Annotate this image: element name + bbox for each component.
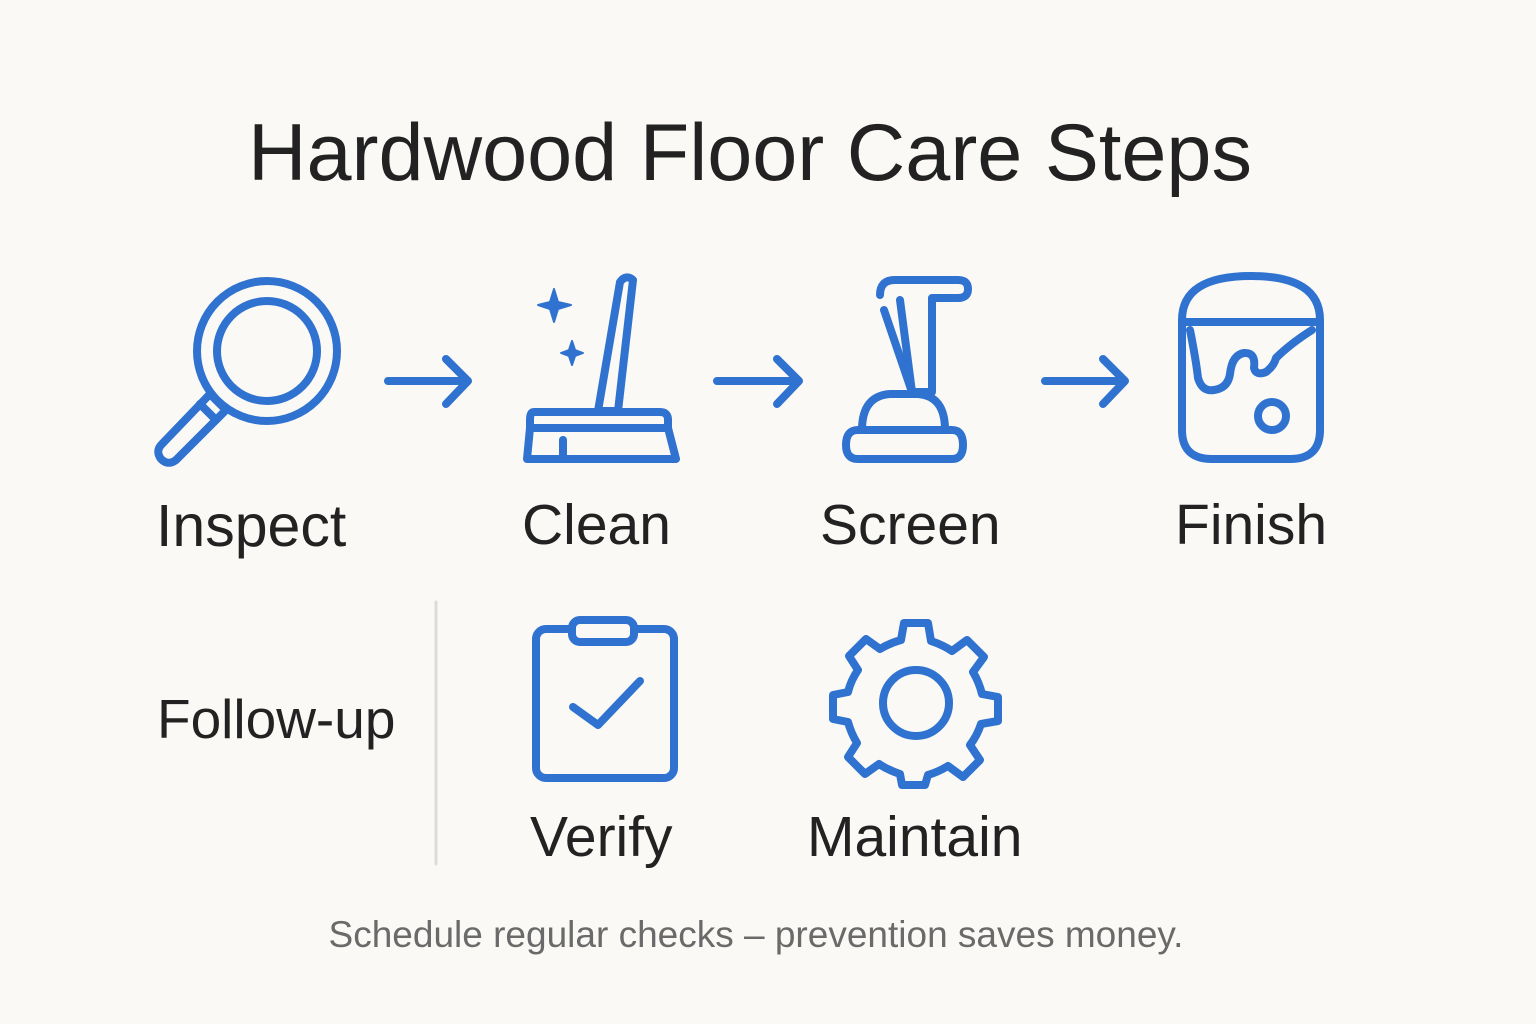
label: Screen: Screen xyxy=(820,493,1001,557)
icon: gear xyxy=(833,623,998,785)
arrow 3 xyxy=(1045,359,1125,404)
arrow 1 xyxy=(388,359,468,404)
icon: floor screener xyxy=(846,280,968,459)
arrow 2 xyxy=(717,359,799,404)
title: Hardwood Floor Care Steps xyxy=(248,108,1252,198)
label: Verify: Verify xyxy=(530,805,673,869)
icon: broom xyxy=(527,277,676,459)
label: Finish: Finish xyxy=(1175,493,1327,557)
divider xyxy=(434,602,438,864)
caption: Schedule regular checks – prevention saves money. xyxy=(329,914,1183,955)
label: Clean: Clean xyxy=(522,493,671,557)
icon: clipboard xyxy=(536,620,674,778)
label: Follow-up: Follow-up xyxy=(157,688,395,750)
icon: magnifier xyxy=(158,281,337,463)
icon: finish can xyxy=(1182,276,1320,459)
label: Inspect: Inspect xyxy=(156,493,346,559)
label: Maintain: Maintain xyxy=(807,805,1022,869)
